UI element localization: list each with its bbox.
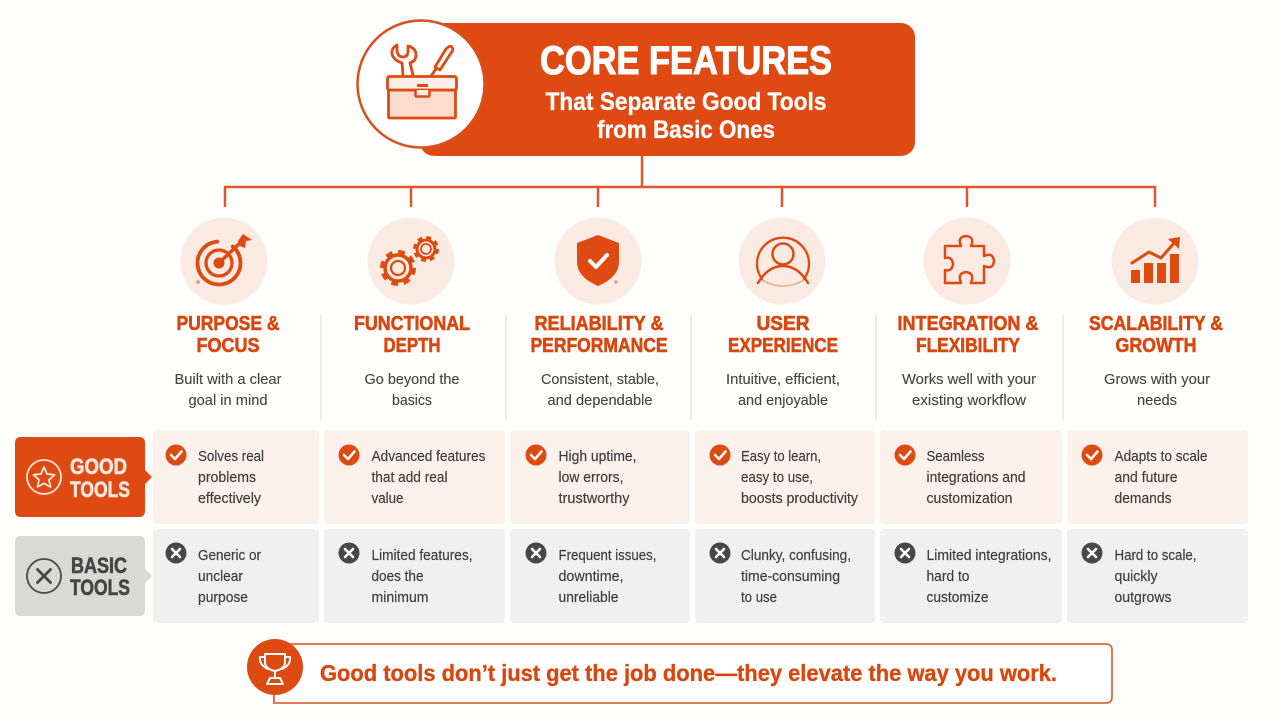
basic tools cell: unclear (198, 569, 243, 585)
icon: shield (554, 218, 642, 304)
panel: purpose and focus (153, 218, 319, 623)
heading (898, 313, 1038, 357)
row label: good tools (15, 437, 152, 517)
callout: closing statement (247, 639, 1112, 703)
heading: INTEGRATION & (898, 313, 1038, 335)
heading: EXPERIENCE (728, 335, 838, 357)
icon: trophy (247, 639, 303, 695)
label text: TOOLS (70, 575, 130, 600)
basic tools cell: to use (741, 590, 777, 606)
good tools cell: High uptime, (558, 449, 636, 465)
description: Built with a clear (174, 372, 282, 388)
basic tools cell (153, 529, 319, 623)
connector tree (225, 156, 1155, 207)
heading: PERFORMANCE (530, 335, 668, 357)
description (174, 372, 282, 409)
basic tools cell (324, 529, 505, 623)
good tools cell: value (372, 491, 404, 507)
basic tools cell (1067, 529, 1248, 623)
subtitle: That Separate Good Tools (546, 88, 826, 116)
title banner (358, 20, 915, 156)
panel: user experience (695, 218, 875, 623)
basic tools cell: purpose (198, 590, 248, 606)
good tools cell: problems (198, 470, 256, 486)
heading: FOCUS (196, 335, 260, 357)
good tools cell: Seamless (926, 449, 984, 465)
callout text: Good tools don’t just get the job done—they elevate the way you work. (320, 660, 1057, 686)
label text: TOOLS (70, 477, 130, 502)
description: basics (392, 393, 432, 409)
good tools cell (153, 430, 319, 524)
label text: BASIC (71, 553, 127, 578)
basic tools cell: downtime, (558, 569, 624, 585)
panel: integration and flexibility (880, 218, 1062, 623)
icon: puzzle piece (924, 218, 1010, 304)
basic tools cell: Generic or (198, 548, 261, 564)
description (364, 372, 460, 409)
description: Go beyond the (364, 372, 460, 388)
description: and dependable (548, 393, 652, 409)
good tools cell: Easy to learn, (741, 449, 821, 465)
heading (1089, 313, 1223, 357)
good tools cell (695, 430, 875, 524)
basic tools cell: minimum (372, 590, 428, 606)
description: Consistent, stable, (541, 372, 659, 388)
basic tools cell (510, 529, 690, 623)
description: Grows with your (1104, 372, 1210, 388)
heading: SCALABILITY & (1089, 313, 1223, 335)
panel: scalability and growth (1067, 218, 1248, 623)
heading: GROWTH (1116, 335, 1196, 357)
icon: toolbox (358, 20, 484, 148)
good tools cell (1067, 430, 1248, 524)
heading (530, 313, 668, 357)
basic tools cell (880, 529, 1062, 623)
icon: user (738, 218, 826, 304)
label text: GOOD (70, 454, 127, 479)
icon: star (27, 460, 61, 494)
row label: basic tools (15, 536, 152, 616)
good tools cell: low errors, (558, 470, 624, 486)
basic tools cell: quickly (1114, 569, 1158, 585)
description: needs (1137, 393, 1177, 409)
panel: functional depth (324, 218, 505, 623)
good tools cell (324, 430, 505, 524)
heading: DEPTH (384, 335, 440, 357)
description: Works well with your (902, 372, 1036, 388)
description (1104, 372, 1210, 409)
basic tools cell: time-consuming (741, 569, 840, 585)
description (541, 372, 659, 409)
description: goal in mind (188, 393, 268, 409)
icon: growth chart (1112, 218, 1198, 304)
good tools cell: trustworthy (558, 491, 630, 507)
basic tools cell: Limited features, (372, 548, 472, 564)
basic tools cell: outgrows (1114, 590, 1172, 606)
good tools cell: effectively (198, 491, 262, 507)
heading: FLEXIBILITY (916, 335, 1021, 357)
heading (354, 313, 470, 357)
icon: target (180, 218, 268, 304)
good tools cell: demands (1114, 491, 1172, 507)
good tools cell: Advanced features (372, 449, 486, 465)
subtitle (546, 88, 826, 144)
basic tools cell: customize (926, 590, 988, 606)
basic tools cell (695, 529, 875, 623)
heading: USER (756, 313, 810, 335)
heading: RELIABILITY & (534, 313, 664, 335)
description: Intuitive, efficient, (726, 372, 840, 388)
basic tools cell: unreliable (558, 590, 618, 606)
subtitle: from Basic Ones (597, 116, 775, 144)
label text (70, 454, 130, 502)
basic tools cell: Limited integrations, (926, 548, 1052, 564)
good tools cell: integrations and (926, 470, 1026, 486)
basic tools cell: does the (372, 569, 424, 585)
description: and enjoyable (738, 393, 828, 409)
good tools cell: customization (926, 491, 1012, 507)
good tools cell: Solves real (198, 449, 264, 465)
good tools cell: that add real (372, 470, 448, 486)
basic tools cell: hard to (926, 569, 970, 585)
description (726, 372, 840, 409)
heading (728, 313, 838, 357)
basic tools cell: Clunky, confusing, (741, 548, 851, 564)
heading: CORE FEATURES (540, 39, 832, 83)
heading: PURPOSE & (176, 313, 280, 335)
label text (70, 553, 130, 600)
description (902, 372, 1036, 409)
icon: cross in circle (27, 559, 61, 593)
description: existing workflow (912, 393, 1027, 409)
icon: gears (368, 218, 454, 304)
good tools cell: and future (1114, 470, 1178, 486)
panel: reliability and performance (510, 218, 690, 623)
good tools cell: easy to use, (741, 470, 813, 486)
good tools cell (880, 430, 1062, 524)
basic tools cell: Hard to scale, (1114, 548, 1196, 564)
heading: FUNCTIONAL (354, 313, 470, 335)
basic tools cell: Frequent issues, (558, 548, 656, 564)
good tools cell: Adapts to scale (1114, 449, 1208, 465)
heading (176, 313, 280, 357)
good tools cell: boosts productivity (741, 491, 859, 507)
good tools cell (510, 430, 690, 524)
